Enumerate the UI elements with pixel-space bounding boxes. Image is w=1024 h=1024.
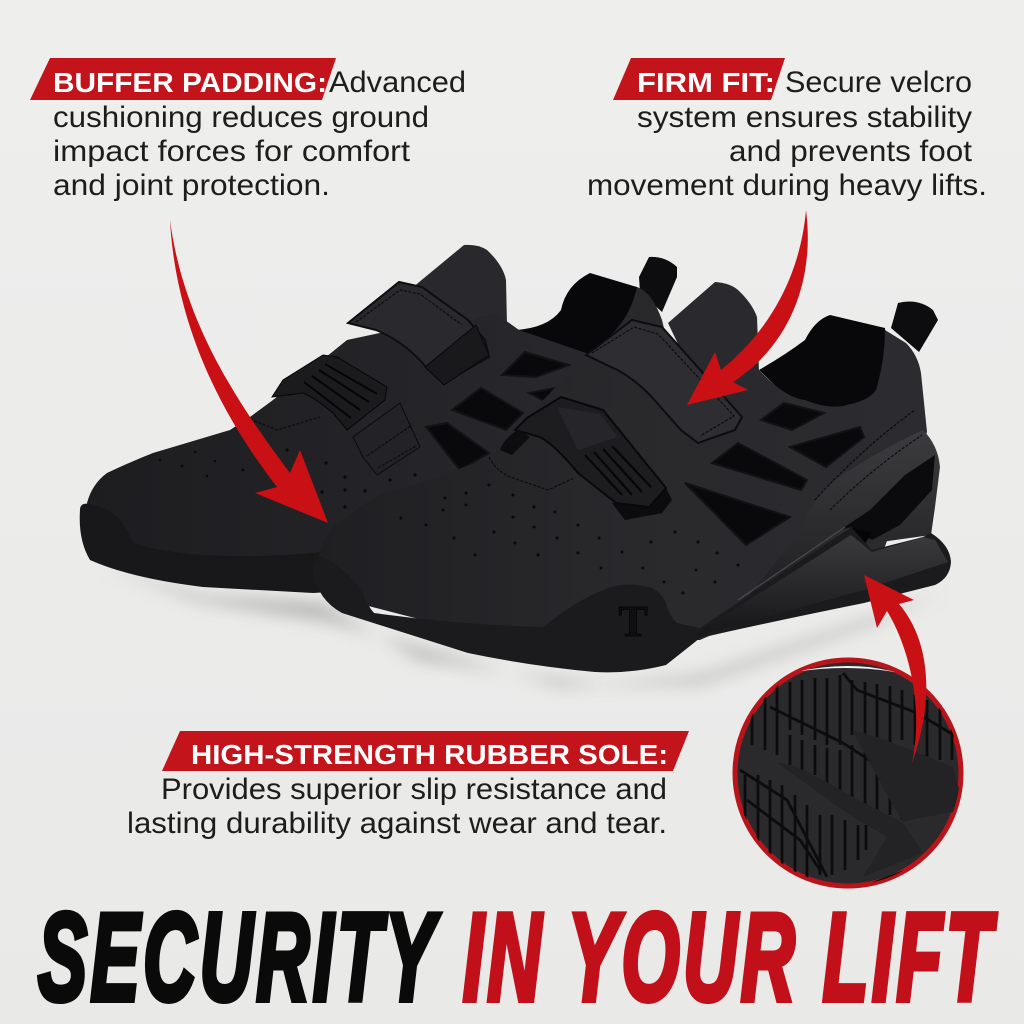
back shoe perforations	[159, 448, 417, 509]
back shoe mesh panels	[426, 352, 586, 470]
heading: FIRM FIT:	[637, 67, 775, 98]
front shoe	[313, 282, 951, 672]
body text: Provides superior slip resistance and	[161, 773, 667, 806]
front shoe tongue	[668, 282, 759, 390]
tread pattern	[740, 666, 965, 895]
back shoe upper strap	[348, 282, 489, 385]
tread wedge upper	[853, 732, 965, 822]
body text	[127, 773, 667, 840]
front shoe mesh panels	[685, 403, 864, 545]
floor shadow	[100, 566, 945, 686]
body text	[53, 66, 466, 202]
back shoe	[80, 245, 677, 593]
back shoe tongue	[405, 245, 507, 340]
body text: lasting durability against wear and tear.	[127, 807, 667, 840]
front shoe perforations	[400, 484, 740, 594]
sole detail lens	[735, 660, 965, 895]
title: SECURITY	[38, 889, 441, 1024]
banner	[162, 731, 689, 771]
arrow: rubber sole	[864, 575, 926, 763]
front shoe sole	[313, 527, 951, 672]
heading: HIGH-STRENGTH RUBBER SOLE:	[191, 739, 668, 770]
front shoe upper velcro strap	[586, 320, 742, 443]
body text: Advanced	[329, 66, 466, 99]
back shoe lower ribbed strap	[272, 355, 420, 475]
arrow: buffer padding	[170, 220, 328, 523]
heel glossy detail	[738, 455, 935, 600]
body text	[587, 66, 987, 202]
eyestay stitching	[489, 457, 574, 490]
callout: buffer padding	[30, 58, 466, 202]
heading: BUFFER PADDING:	[53, 67, 327, 98]
back shoe collar panel	[605, 287, 668, 370]
front shoe strap shadow	[612, 488, 672, 520]
body text: cushioning reduces ground	[53, 101, 429, 134]
body text: Secure velcro	[785, 66, 972, 99]
body text: movement during heavy lifts.	[587, 169, 987, 202]
back shoe collar lining	[515, 273, 662, 365]
banner	[613, 58, 785, 100]
tread wedge lower	[788, 764, 878, 826]
back shoe throat stitching	[250, 417, 320, 430]
T logo: T	[618, 597, 648, 646]
body text: and joint protection.	[53, 169, 330, 202]
body text: and prevents foot	[729, 135, 972, 168]
back shoe upper	[87, 315, 640, 590]
front shoe upper	[318, 330, 927, 640]
body text: impact forces for comfort	[53, 135, 410, 168]
back shoe pull tab	[639, 257, 677, 312]
callout: rubber sole	[127, 731, 689, 840]
heel block	[695, 535, 948, 636]
back shoe sole	[80, 504, 330, 593]
body text: system ensures stability	[637, 101, 972, 134]
front shoe heel cup	[730, 430, 940, 620]
front shoe plastic strap	[500, 397, 666, 507]
front shoe collar lining	[759, 315, 890, 410]
callout: firm fit	[587, 58, 987, 202]
banner	[30, 58, 336, 100]
arrow: firm fit	[687, 210, 808, 405]
heel stitching	[815, 410, 922, 510]
front shoe pull tab	[891, 302, 938, 352]
